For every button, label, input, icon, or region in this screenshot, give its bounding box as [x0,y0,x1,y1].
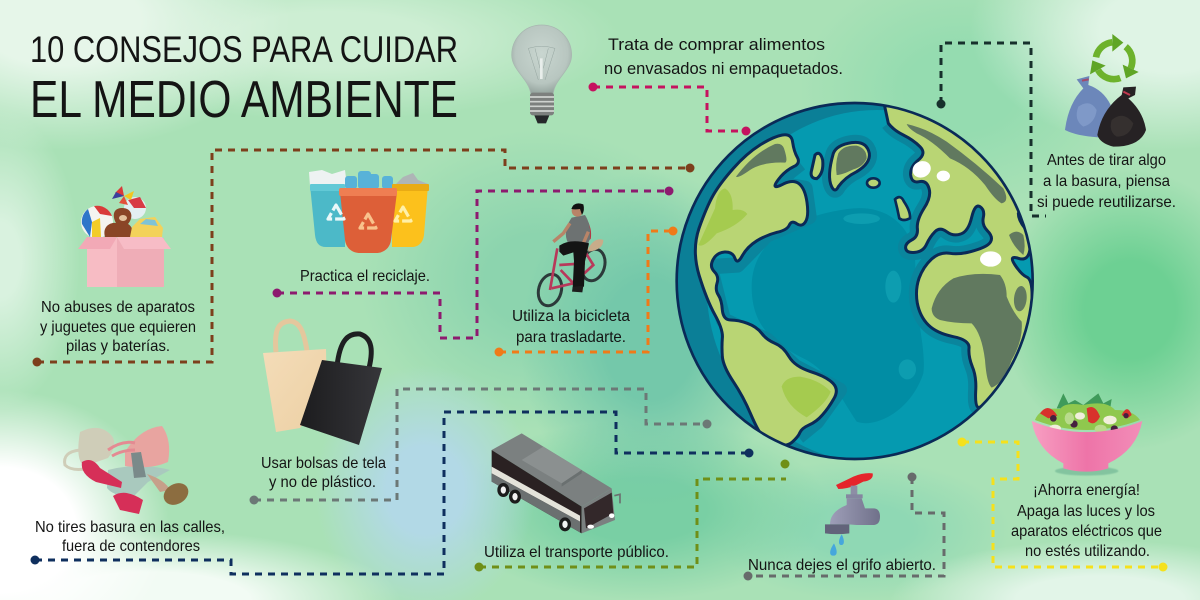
connector: gray bag [250,389,712,504]
text: batteries tip: No abuses de aparatos [41,299,195,316]
connector: black [936,43,1046,216]
rider head [572,205,583,217]
coastal shadow [710,123,991,437]
black bag [1097,87,1146,147]
text: reuse tip: si puede reutilizarse. [1037,194,1176,211]
body [830,498,880,525]
icon: toy box [78,186,171,287]
handle [836,473,873,489]
text: energy tip: ¡Ahorra energía! [1033,482,1140,499]
island: Greenland [830,142,869,190]
box [87,238,117,287]
spool [160,479,192,509]
text: cloth bags tip [261,455,386,491]
text: cloth bags tip: y no de plástico. [269,474,376,491]
text: energy tip: no estés utilizando. [1025,543,1150,560]
connector: purple [272,186,674,338]
island: small [867,178,880,188]
blue bag [1065,76,1111,137]
icon: cyclist [535,203,608,308]
teddy bear [104,208,133,237]
connector: olive [474,460,790,572]
land shading [736,124,1028,388]
text: reuse tip: Antes de tirar algo [1047,152,1166,169]
gray bottle [131,452,146,478]
text: bicycle tip [512,308,630,346]
pink mask [125,426,169,467]
rack [588,239,603,252]
text: litter tip [35,519,225,555]
icon: light bulb [512,25,572,123]
bike frame [550,248,593,290]
text: energy tip [1011,482,1162,560]
text: food tip [604,35,843,78]
connector: orange [494,226,678,356]
text: recycle tip: Practica el reciclaje. [300,268,430,285]
text: reuse tip [1037,152,1176,211]
text: litter tip: fuera de contendores [62,538,200,555]
side [492,450,582,533]
bowl [1032,421,1142,472]
connector: gray faucet [744,472,944,580]
icon: bus [492,433,620,533]
gray-green bag [107,466,170,496]
globe [676,100,1047,463]
beach ball [81,206,113,238]
blue bin [310,185,345,247]
text: reuse tip: a la basura, piensa [1043,173,1170,190]
gray mask [78,428,114,466]
salad [1035,403,1140,430]
stem and collar [851,486,857,495]
text: food tip: no envasados ni empaquetados. [604,59,843,78]
recycle arrows [1096,42,1132,79]
icon: litter [65,426,192,514]
text: food tip: Trata de comprar alimentos [608,35,825,54]
connector: navy [30,412,754,574]
yellow bin [392,185,428,247]
title [30,29,458,129]
connector: yellow [958,438,1168,572]
text: batteries tip [40,299,196,355]
rider torso [566,215,590,246]
text: faucet tip: Nunca dejes el grifo abierto. [748,557,936,574]
pinwheel [112,186,134,205]
paper [309,170,347,186]
island: British Isles [895,197,910,220]
red bottle [82,460,122,488]
text: energy tip: aparatos eléctricos que [1011,523,1162,540]
red can [113,493,143,514]
text: energy tip: Apaga las luces y los [1017,503,1155,520]
text: bicycle tip: para trasladarte. [516,329,626,346]
toy car [130,217,163,237]
title: 10 CONSEJOS PARA CUIDAR [30,29,458,70]
text: batteries tip: pilas y baterías. [66,338,170,355]
leaves [1057,393,1112,410]
cans [395,173,428,185]
text: public transport tip: Utiliza el transporte público. [484,544,669,561]
icon: recycling bins [309,170,429,253]
beige bag [276,321,307,352]
continent: Americas [695,135,836,445]
rider legs [559,241,589,288]
icon: salad bowl [1032,393,1142,476]
icon: faucet [825,473,880,556]
text: bicycle tip: Utiliza la bicicleta [512,308,630,325]
icon: recycling and trash bags [1065,34,1146,147]
connector: crimson [588,82,750,136]
bike wheels [578,247,608,283]
connector: brown [32,150,694,366]
rider arms [553,223,588,252]
black bag [337,334,371,372]
water drops [830,543,837,556]
text: batteries tip: y juguetes que equieren [40,319,196,336]
continent: Europe, Asia and Africa [883,100,1043,407]
front [582,488,615,533]
roof [492,433,612,507]
text: cloth bags tip: Usar bolsas de tela [261,455,386,472]
icon: cloth bags [263,321,382,445]
text: litter tip: No tires basura en las calles, [35,519,225,536]
orange bin [340,192,397,253]
wheels [499,485,508,495]
backpack strap [585,217,591,241]
tan strip [147,474,170,492]
title: EL MEDIO AMBIENTE [30,71,458,129]
bottles [345,171,393,189]
island: Iceland-like [811,153,823,179]
